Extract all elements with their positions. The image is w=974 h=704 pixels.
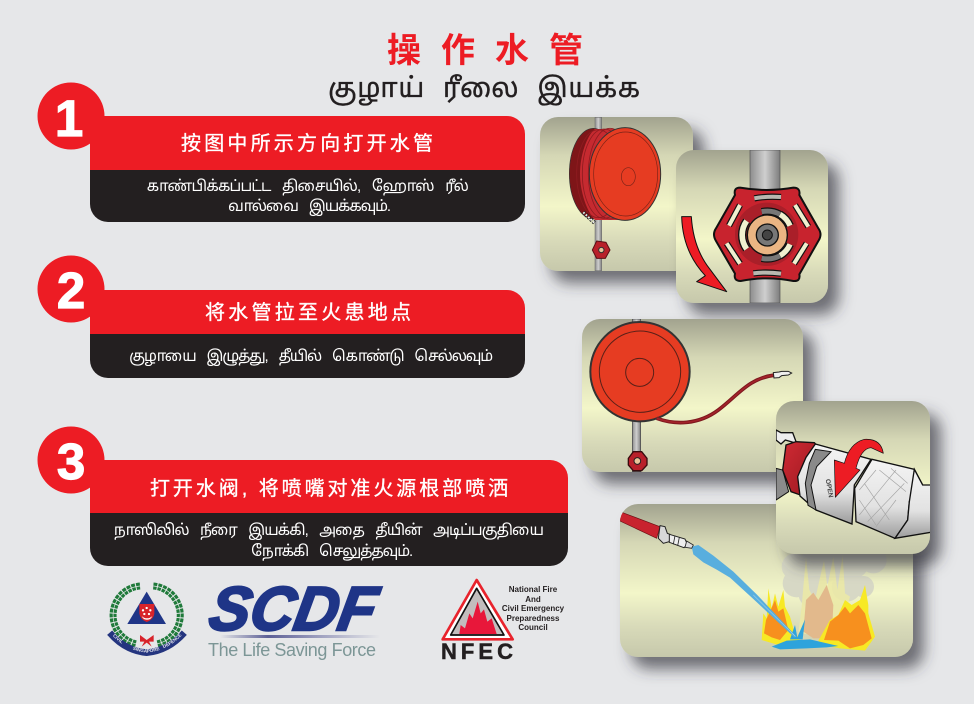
logo: civil defence emblem: CIVIL	[113, 634, 122, 644]
peach flame	[803, 585, 833, 638]
panel: step 3	[38, 426, 568, 566]
step 1 Tamil text	[147, 178, 469, 217]
step 1 number badge	[38, 82, 104, 150]
logo: NFEC: And	[525, 595, 541, 604]
logo: NFEC	[441, 580, 565, 664]
illustration: hose reel on wall	[540, 117, 693, 271]
arrow: turn direction	[682, 217, 727, 292]
step 1 Tamil text: காண்பிக்கப்பட்ட திசையில், ஹோஸ் ரீல்	[147, 178, 469, 196]
nozzle	[620, 512, 660, 538]
water pool and splash	[772, 639, 838, 649]
illustration: valve wheel with turn arrow	[676, 150, 828, 303]
right flame	[818, 585, 875, 651]
logo: NFEC: Council	[518, 623, 548, 632]
step 2 red bar	[90, 290, 525, 334]
step 1 dark bar	[90, 170, 525, 222]
step 3 number badge	[38, 426, 104, 494]
step 3 Tamil text: நாஸிலில் நீரை இயக்கி, அதை தீயின் அடிப்பகுதியை	[114, 522, 544, 541]
step 2 number badge	[38, 256, 104, 322]
step 1 number badge: 1	[55, 90, 83, 147]
logo: civil defence emblem	[107, 582, 187, 656]
pale flames	[798, 555, 850, 637]
arrow: twist direction	[834, 439, 883, 497]
step 3 Tamil text	[114, 522, 544, 561]
logo: NFEC: NFEC	[441, 639, 513, 664]
logo: NFEC: Civil Emergency	[502, 604, 565, 613]
illustration: hose pulled from reel	[582, 319, 803, 472]
panel: step 1	[38, 82, 525, 222]
step 2 dark bar	[90, 334, 525, 378]
illustration: spraying water at fire	[620, 504, 913, 657]
smoke	[782, 556, 885, 603]
title: Chinese: 操作水管	[387, 32, 583, 70]
step 3 Tamil text: நோக்கி செலுத்தவும்.	[251, 543, 413, 561]
label: OPEN: OPEN	[824, 478, 834, 498]
step 1 Tamil text: வால்வை இயக்கவும்.	[228, 198, 391, 217]
logo: SCDF wordmark: The Life Saving Force	[208, 640, 376, 660]
step 3 red bar	[90, 460, 568, 513]
logo: civil defence emblem: DEFENCE	[162, 633, 182, 648]
water stream	[692, 545, 797, 637]
logo: SCDF wordmark: SCDF	[204, 574, 384, 644]
step 2 Tamil text: குழாயை இழுத்து, தீயில் கொண்டு செல்லவும்	[129, 348, 493, 367]
step 2 Chinese text: 将水管拉至火患地点	[205, 301, 411, 324]
left flame	[762, 588, 800, 646]
step 3 Chinese text: 打开水阀, 将喷嘴对准火源根部喷洒	[150, 477, 508, 500]
logo: civil defence emblem: SINGAPORE	[132, 646, 160, 653]
logo: NFEC: National Fire	[509, 585, 558, 594]
step 1 Chinese text: 按图中所示方向打开水管	[181, 132, 433, 155]
step 3 number badge: 3	[57, 433, 85, 490]
step 1 red bar	[90, 116, 525, 170]
logo: NFEC: Preparedness	[507, 614, 560, 623]
illustration: nozzle twist to open	[776, 401, 934, 554]
panel: step 2	[38, 256, 525, 378]
step 3 dark bar	[90, 513, 568, 566]
title: Tamil: குழாய் ரீலை இயக்க	[328, 73, 640, 106]
step 2 number badge: 2	[57, 262, 85, 319]
